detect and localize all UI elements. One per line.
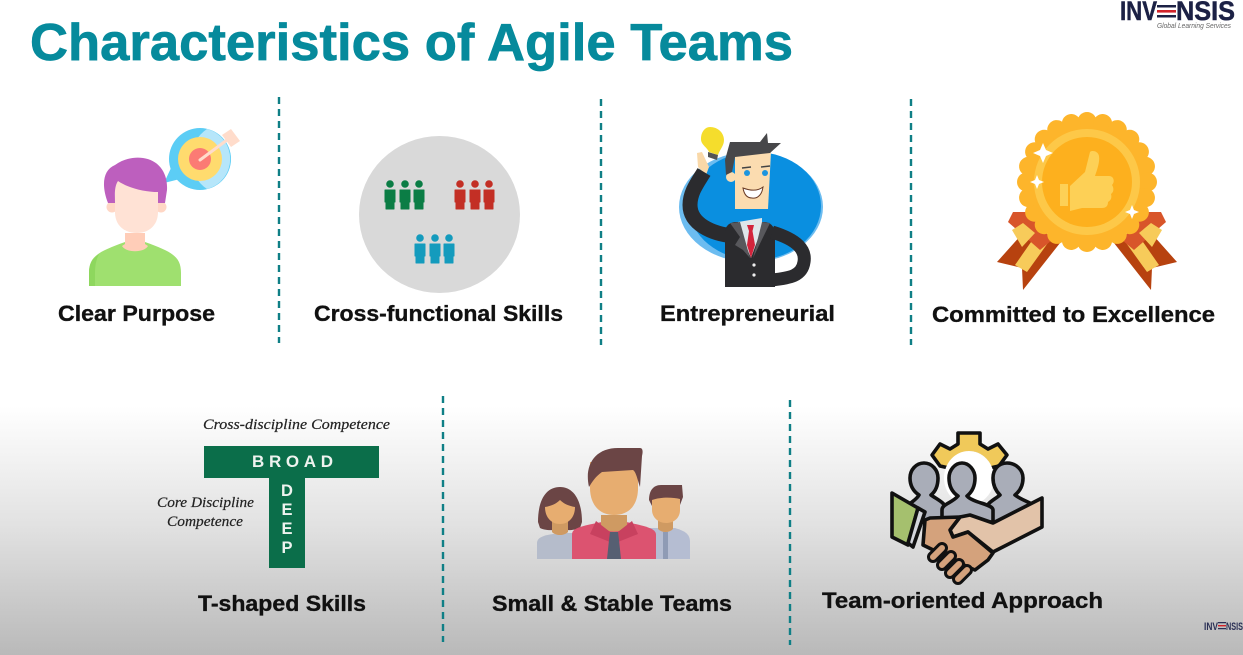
- panel: entrepreneurial: [660, 127, 835, 326]
- deep text: E: [281, 520, 293, 538]
- logo: Invensis: Global Learning Services: [1157, 23, 1231, 30]
- icon: businessman with lightbulb: [679, 127, 823, 287]
- deep text: P: [281, 539, 293, 557]
- panel: cross-functional skills: [314, 136, 563, 326]
- label: Small & Stable Teams: [492, 591, 732, 616]
- core discipline note: Core Discipline: [157, 495, 254, 511]
- chart: T-shape diagram: [157, 417, 390, 568]
- icon: three teams in a circle: [359, 136, 520, 293]
- label: Committed to Excellence: [932, 302, 1215, 327]
- label: Clear Purpose: [58, 301, 215, 326]
- broad text: BROAD: [252, 452, 333, 471]
- icon: gold medal with thumbs up: [997, 112, 1177, 290]
- panel: committed to excellence: [932, 112, 1215, 327]
- deep text: [281, 482, 293, 557]
- icon: three team members: [537, 448, 690, 559]
- title: Characteristics of Agile Teams: [30, 14, 793, 72]
- logo: Invensis: [1120, 0, 1235, 30]
- cross-discipline note: Cross-discipline Competence: [203, 417, 390, 433]
- core discipline note: Competence: [167, 514, 243, 530]
- panel: small and stable teams: [492, 448, 732, 616]
- logo: small Invensis watermark: [1204, 621, 1243, 633]
- label: T-shaped Skills: [198, 591, 366, 616]
- logo: small Invensis watermark: INV: [1204, 621, 1219, 633]
- label: Team-oriented Approach: [822, 588, 1103, 613]
- label: Cross-functional Skills: [314, 301, 563, 326]
- panel: team-oriented approach: [822, 433, 1103, 613]
- icon: handshake with team and gear: [892, 433, 1042, 579]
- icon: person with target: [89, 128, 240, 286]
- panel: clear purpose: [58, 128, 240, 326]
- core discipline note: [157, 495, 254, 530]
- deep text: E: [281, 501, 293, 519]
- T shape: [204, 446, 379, 568]
- label: Entrepreneurial: [660, 301, 835, 326]
- panel: t-shaped skills: [157, 417, 390, 616]
- deep text: D: [281, 482, 293, 500]
